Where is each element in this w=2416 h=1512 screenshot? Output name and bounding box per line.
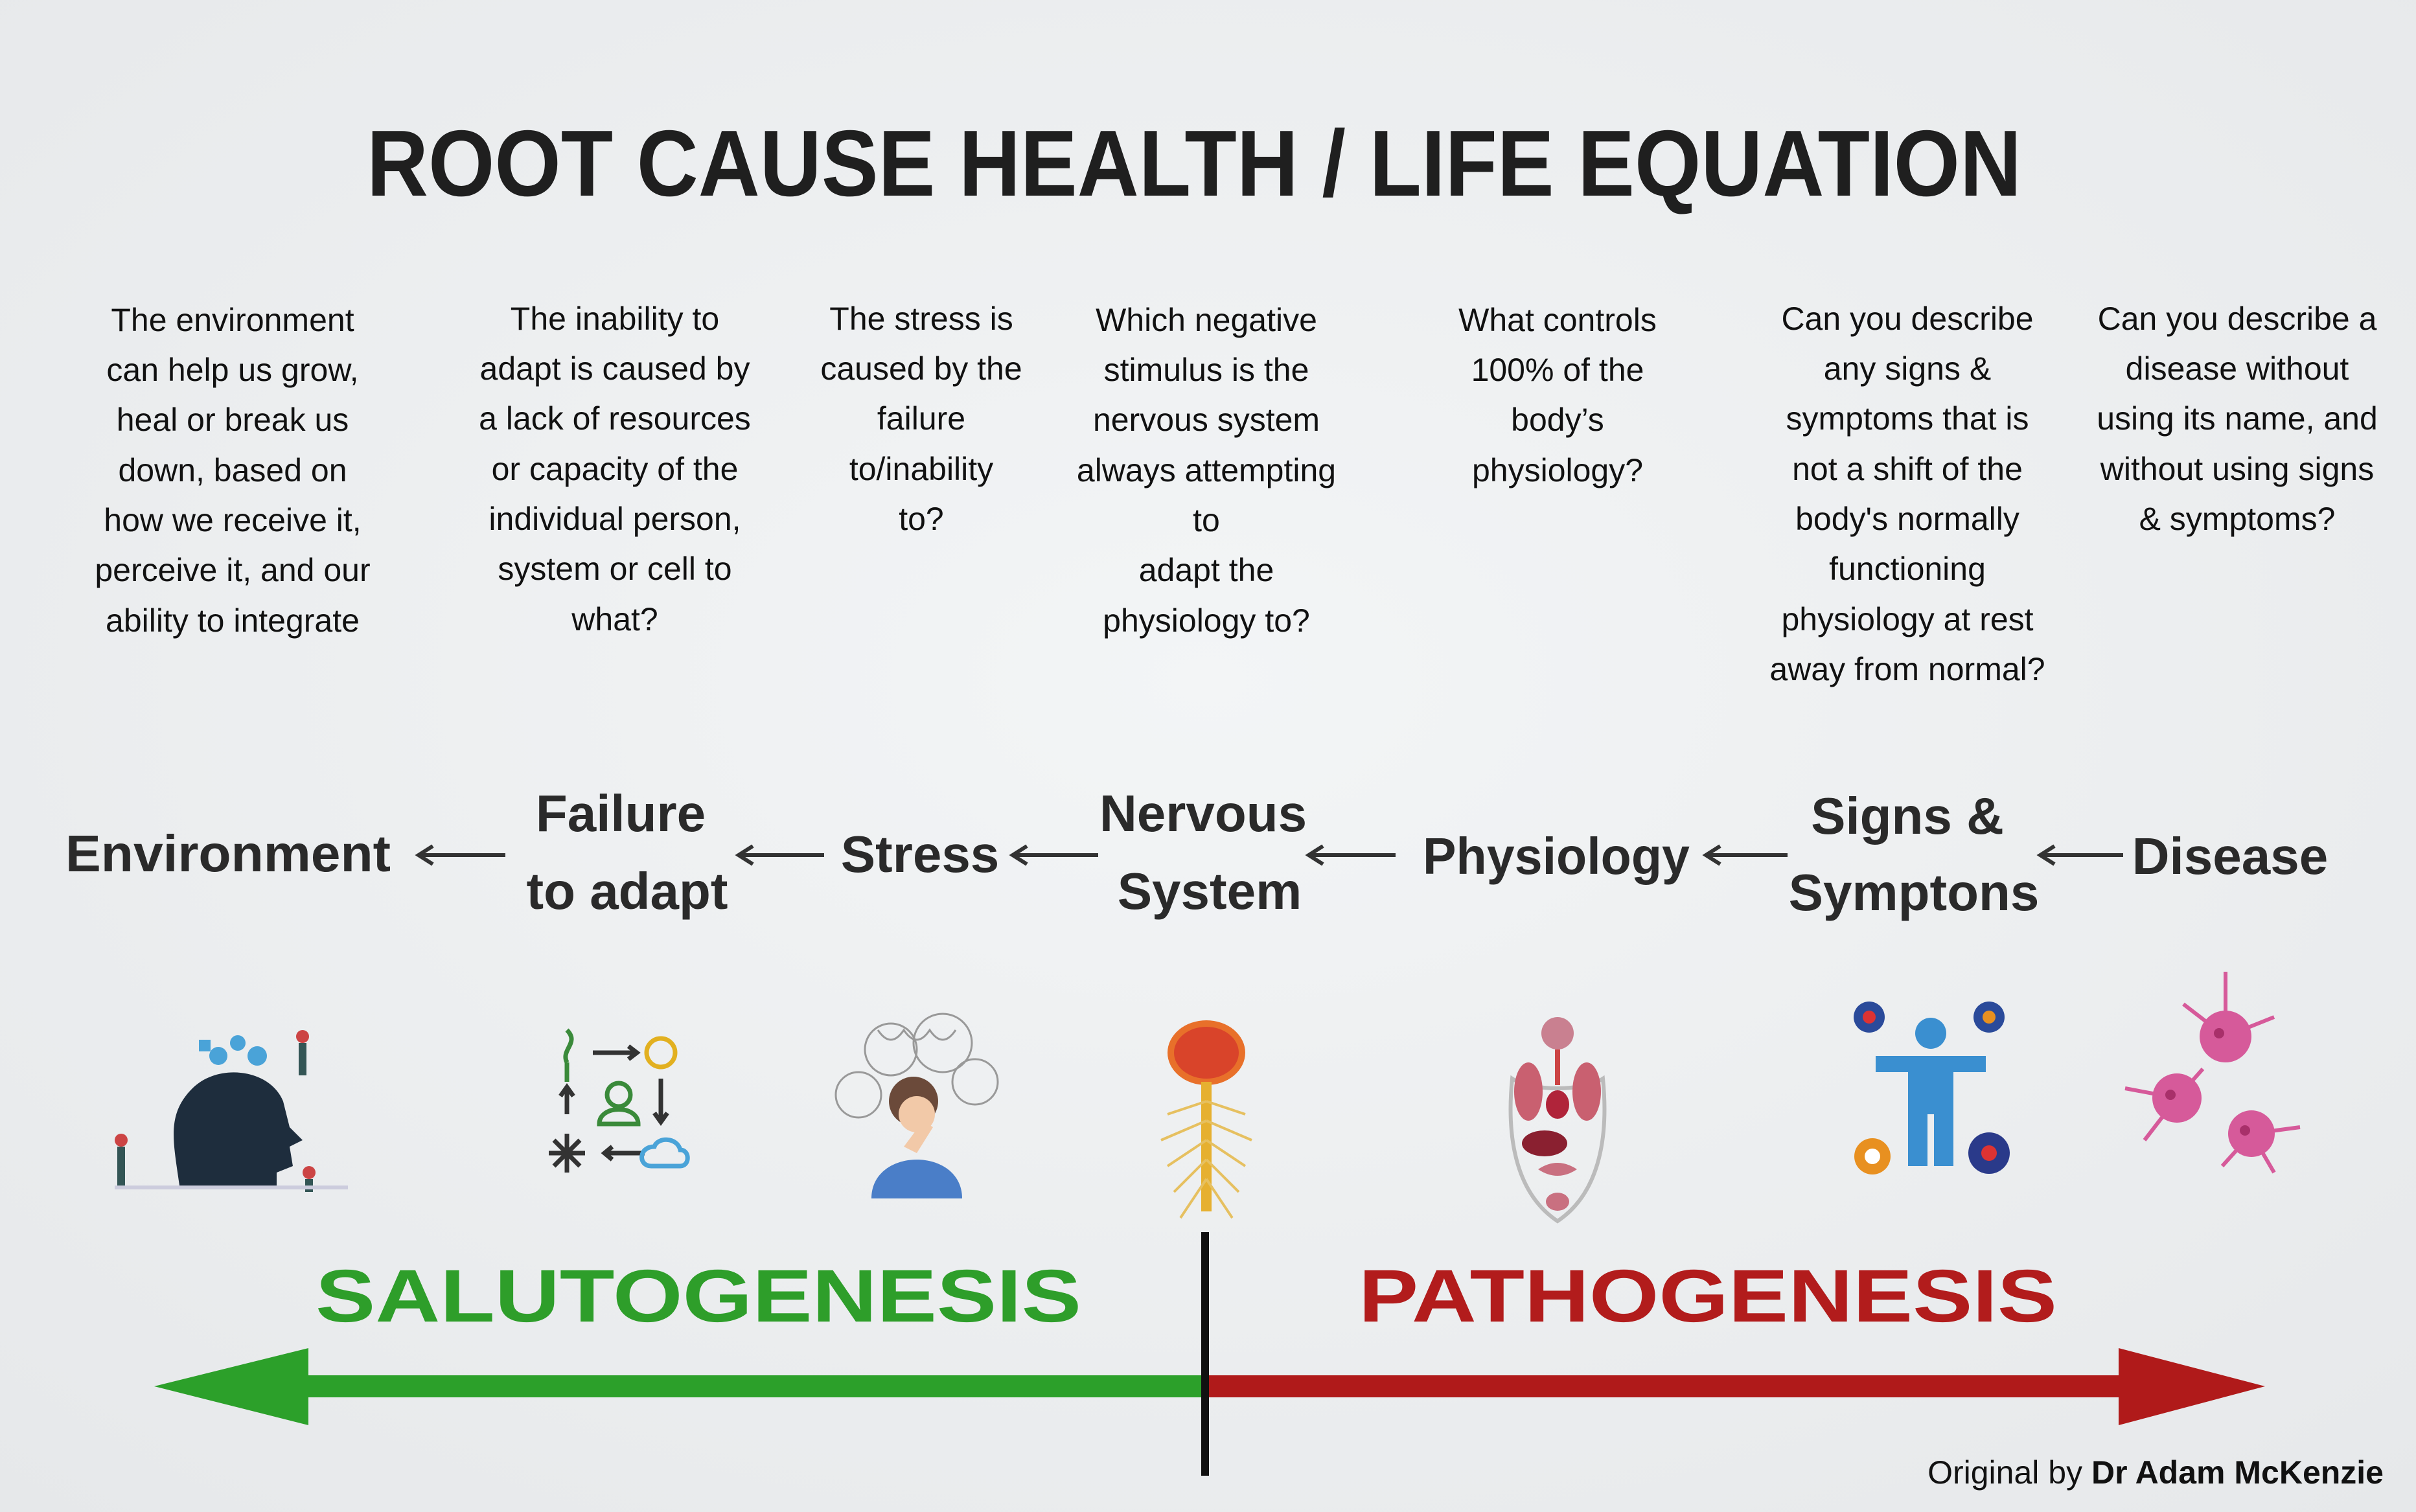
arrow: red pathogenesis [1209, 1348, 2265, 1425]
text block: disease question [2097, 301, 2378, 537]
text block: environment question: can help us grow, [106, 352, 359, 388]
text block: failure question: or capacity of the [492, 451, 738, 487]
label: nervous system [1099, 785, 1307, 920]
text block: signs question: Can you describe [1781, 301, 2034, 337]
text block: stress question [820, 301, 1022, 537]
text block: environment question: heal or break us [117, 402, 349, 438]
icon: physiology organs [1511, 1017, 1604, 1221]
label: signs and symptoms: Symptons [1789, 864, 2039, 921]
icon: signs and symptoms body [1854, 1002, 2010, 1174]
label: environment: Environment [65, 825, 391, 882]
label: disease: Disease [2132, 827, 2328, 885]
text block: failure question: a lack of resources [479, 400, 751, 437]
text block: nervous system question: Which negative [1096, 302, 1317, 338]
text block: nervous system question: always attempting [1077, 452, 1336, 488]
text block: environment question [95, 302, 371, 639]
text block: physiology question: 100% of the [1471, 352, 1644, 388]
arrows between labels [419, 846, 2123, 864]
text block: stress question: caused by the [820, 350, 1022, 387]
text block: disease question: disease without [2126, 350, 2349, 387]
text block: signs question: not a shift of the [1792, 451, 2023, 487]
label: stress: Stress [841, 825, 999, 883]
icon: nervous system [1161, 1020, 1252, 1218]
text block: physiology question: body’s [1511, 402, 1604, 438]
label: failure to adapt: Failure [536, 785, 706, 842]
text block: physiology question [1458, 302, 1657, 488]
text block: failure question: individual person, [489, 501, 741, 537]
text block: disease question: without using signs [2100, 451, 2374, 487]
icon: failure to adapt cycle [549, 1030, 687, 1173]
text block: nervous system question [1077, 302, 1336, 639]
text block: disease question: Can you describe a [2098, 301, 2377, 337]
text block: nervous system question: nervous system [1093, 402, 1320, 438]
divider line [1201, 1232, 1209, 1476]
text block: disease question: & symptoms? [2139, 501, 2335, 537]
text block: environment question: how we receive it, [104, 502, 362, 538]
text block: physiology question: physiology? [1472, 452, 1643, 488]
icon: disease cells [2125, 972, 2300, 1173]
icon: environment head [115, 1030, 348, 1192]
label: signs and symptoms [1789, 787, 2039, 921]
arrow: green salutogenesis [154, 1348, 1205, 1425]
text block: nervous system question: adapt the [1139, 552, 1274, 588]
text block: failure question [479, 301, 751, 637]
text block: stress question: The stress is [829, 301, 1013, 337]
text block: environment question: The environment [111, 302, 354, 338]
text block: environment question: ability to integrate [106, 602, 360, 639]
text block: failure question: adapt is caused by [480, 350, 750, 387]
text block: signs question: physiology at rest [1781, 601, 2034, 637]
text block: stress question: failure [877, 400, 965, 437]
text block: environment question: perceive it, and our [95, 552, 371, 588]
label: nervous system: Nervous [1099, 785, 1307, 842]
labels row [65, 785, 2328, 921]
text block: failure question: The inability to [511, 301, 719, 337]
text block: nervous system question: stimulus is the [1104, 352, 1309, 388]
text block: signs question [1769, 301, 2045, 687]
footer credit: Original by Dr Adam McKenzie [1927, 1454, 2384, 1491]
label: nervous system: System [1118, 862, 1302, 920]
text block: disease question: using its name, and [2097, 400, 2378, 437]
text block: signs question: body's normally [1795, 501, 2019, 537]
label: physiology: Physiology [1423, 827, 1690, 885]
text block: signs question: functioning [1829, 551, 1986, 587]
label: signs and symptoms: Signs & [1811, 787, 2004, 845]
text block: stress question: to/inability [849, 451, 993, 487]
text block: failure question: system or cell to [498, 551, 732, 587]
title: ROOT CAUSE HEALTH / LIFE EQUATION [367, 111, 2021, 216]
text block: nervous system question: to [1193, 502, 1220, 538]
text block: physiology question: What controls [1458, 302, 1657, 338]
text block: signs question: away from normal? [1769, 651, 2045, 687]
heading: salutogenesis: SALUTOGENESIS [316, 1255, 1081, 1338]
label: failure to adapt [526, 785, 728, 920]
label: failure to adapt: to adapt [526, 862, 728, 920]
text block: environment question: down, based on [118, 452, 347, 488]
heading: pathogenesis: PATHOGENESIS [1359, 1255, 2057, 1338]
text block: nervous system question: physiology to? [1103, 602, 1310, 639]
text block: stress question: to? [899, 501, 944, 537]
text block: failure question: what? [571, 601, 658, 637]
text block: signs question: symptoms that is [1786, 400, 2029, 437]
icon: stress person [836, 1014, 998, 1198]
text block: signs question: any signs & [1824, 350, 1991, 387]
